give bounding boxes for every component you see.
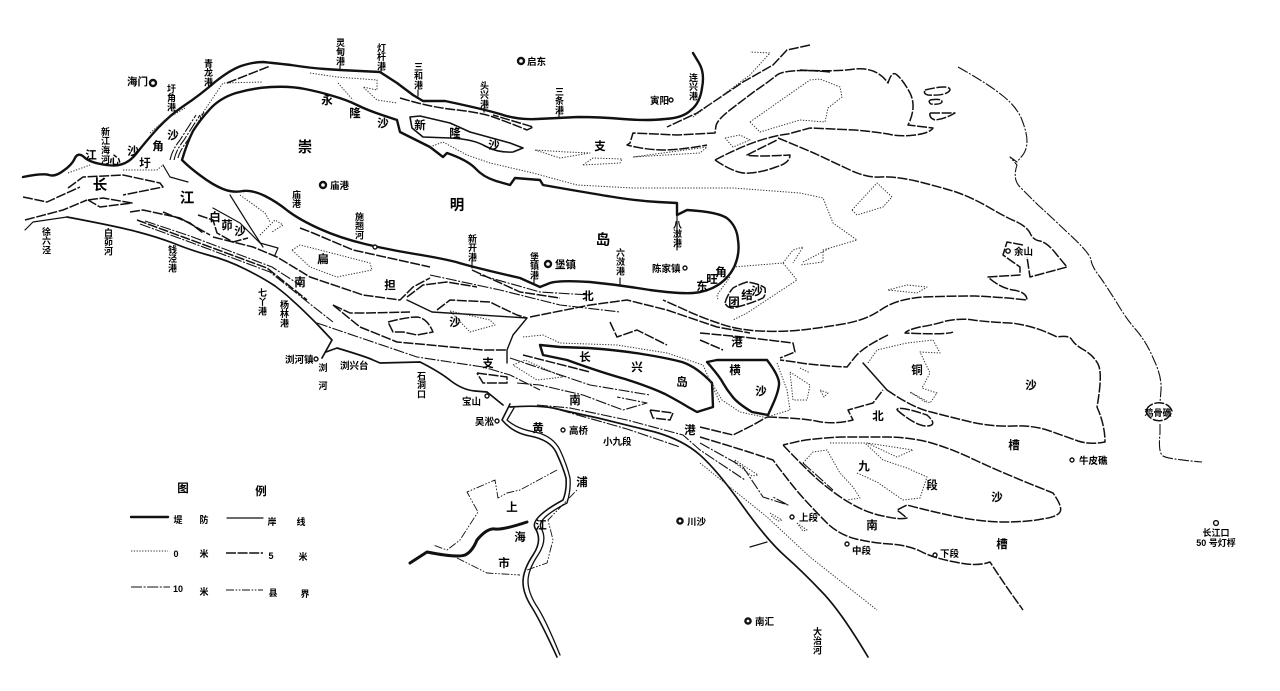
river-mouth tick marks <box>340 65 677 285</box>
vertical port labels: 庙港 <box>291 189 301 209</box>
legend row: levee and shoreline: 岸 <box>267 516 277 527</box>
water and shoal names: 沙 <box>449 316 461 329</box>
water and shoal names: 新 <box>414 118 426 132</box>
water and shoal names: 沙 <box>991 491 1003 504</box>
Biandan shoal and south branch <box>137 220 620 390</box>
vertical port labels: 杨林港 <box>279 299 289 328</box>
legend title: 图 <box>177 482 189 495</box>
vertical port labels: 头兴港 <box>479 80 489 109</box>
water and shoal names: 北 <box>582 290 594 303</box>
settlement markers <box>150 58 1218 624</box>
vertical port labels: 堡镇港 <box>529 251 539 280</box>
water and shoal names: 兴 <box>631 360 643 374</box>
water and shoal names: 团 <box>728 296 740 309</box>
water and shoal names: 北 <box>872 410 884 423</box>
legend title: 例 <box>255 484 267 498</box>
vertical port labels: 六滧港 <box>615 247 625 276</box>
water and shoal names: 角 <box>715 265 727 279</box>
vertical port labels: 七丫港 <box>257 288 267 316</box>
water and shoal names: 沙 <box>377 117 389 130</box>
water and shoal names: 支 <box>594 139 606 153</box>
Chongming north and outer channels <box>400 45 1067 331</box>
legend row: 10 metre and county border: 米 <box>199 586 209 597</box>
offshore 0 metre and Tuanjie shoal <box>717 183 927 320</box>
water and shoal names: 南 <box>866 519 878 532</box>
Chongming island levee <box>182 87 739 293</box>
Jiuduan shoal <box>783 437 1061 522</box>
horizontal place labels: 浏河镇 <box>285 354 314 366</box>
water and shoal names: 黄 <box>532 421 544 435</box>
south channel contours <box>517 383 1023 610</box>
legend row: 0 metre and 5 metre: 0 <box>173 549 179 559</box>
vertical port labels: 施翘河 <box>354 211 364 241</box>
vertical port labels: 圩角港 <box>166 83 176 112</box>
vertical port labels: 石洞口 <box>416 371 426 399</box>
vertical port labels: 三和港 <box>413 62 423 90</box>
vertical port labels: 新江海河 <box>100 126 110 165</box>
water and shoal names: 浦 <box>576 475 588 489</box>
Changxing island <box>510 300 795 412</box>
Suzhou Creek thick line <box>410 522 527 563</box>
horizontal place labels: 寅阳 <box>650 95 669 107</box>
Baimao shoal and upstream channels <box>23 66 283 255</box>
legend <box>131 482 310 599</box>
horizontal place labels: 鸡骨礁 <box>1144 407 1172 418</box>
water and shoal names: 横 <box>729 363 741 377</box>
water and shoal names: 段 <box>926 478 938 492</box>
water and shoal names: 江 <box>535 519 547 532</box>
water and shoal names: 东 <box>696 279 708 293</box>
legend row: 0 metre and 5 metre: 米 <box>298 551 308 562</box>
horizontal place labels: 中段 <box>852 545 872 557</box>
vertical port labels: 灵甸港 <box>335 38 345 66</box>
horizontal place labels: 上段 <box>799 512 818 524</box>
water and shoal names: 南 <box>569 394 581 407</box>
water and shoal names: 岛 <box>596 231 610 249</box>
legend row: levee and shoreline: 防 <box>199 514 209 525</box>
water and shoal names: 角 <box>152 139 164 153</box>
water and shoal names: 槽 <box>996 537 1008 551</box>
water and shoal names: 隆 <box>449 126 461 140</box>
horizontal place labels: 宝山 <box>462 396 481 408</box>
Shanghai boundary <box>433 470 577 575</box>
legend row: 0 metre and 5 metre: 5 <box>268 551 274 561</box>
horizontal place labels: 50 号灯桴 <box>1196 537 1236 548</box>
horizontal place labels: 河 <box>318 380 328 391</box>
horizontal place labels: 下段 <box>940 548 960 560</box>
vertical port labels: 钱泾港 <box>167 244 177 273</box>
vertical port labels: 白茆河 <box>103 227 113 257</box>
horizontal place labels: 小九段 <box>603 436 632 448</box>
water and shoal names: 九 <box>858 460 870 473</box>
horizontal place labels: 吴淞 <box>475 416 495 428</box>
legend row: 10 metre and county border: 县 <box>268 588 278 598</box>
vertical port labels: 新开港 <box>467 233 477 262</box>
water and shoal names: 港 <box>731 335 743 349</box>
horizontal place labels: 川沙 <box>687 517 706 528</box>
horizontal place labels: 启东 <box>527 56 546 68</box>
water and shoal names: 沙 <box>1025 379 1037 392</box>
vertical port labels <box>41 38 822 656</box>
water and shoal names: 白 <box>209 210 221 224</box>
horizontal place labels: 高桥 <box>569 425 588 437</box>
water and shoal names: 上 <box>506 501 518 514</box>
water and shoal names: 旺 <box>706 273 718 286</box>
water and shoal names: 沙 <box>234 225 246 238</box>
water and shoal names: 沙 <box>167 129 179 142</box>
water and shoal names: 铜 <box>911 363 923 377</box>
horizontal place labels: 长江口 <box>1202 527 1230 538</box>
legend row: levee and shoreline: 堤 <box>173 515 183 525</box>
water and shoal names: 江 <box>85 149 97 162</box>
water and shoal names: 沙 <box>127 145 139 158</box>
north bank levee <box>23 53 703 230</box>
horizontal place labels: 庙港 <box>330 180 350 192</box>
water and shoal names: 明 <box>450 198 464 214</box>
vertical port labels: 徐六泾 <box>41 226 51 256</box>
water and shoal names: 港 <box>684 423 696 437</box>
legend row: levee and shoreline <box>131 514 306 527</box>
horizontal place labels: 余山 <box>1014 246 1033 258</box>
legend row: levee and shoreline: 线 <box>296 516 306 527</box>
vertical port labels: 连兴港 <box>688 72 698 101</box>
water and shoal names: 永 <box>321 93 333 107</box>
legend title <box>177 482 267 498</box>
vertical port labels: 灯杆港 <box>376 43 386 71</box>
vertical port labels: 大治河 <box>812 626 822 656</box>
horizontal place labels: 堡镇 <box>555 258 576 271</box>
water and shoal names: 结 <box>741 288 753 302</box>
horizontal place labels <box>127 56 1236 628</box>
water and shoal names: 海 <box>514 530 526 544</box>
water and shoal names: 沙 <box>751 285 763 298</box>
water and shoal names: 茆 <box>221 218 233 232</box>
water and shoal names: 沙 <box>488 139 500 152</box>
legend row: 0 metre and 5 metre: 米 <box>199 548 209 559</box>
horizontal place labels: 浏 <box>318 362 328 373</box>
vertical port labels: 三条港 <box>554 87 564 115</box>
water and shoal names: 长 <box>579 350 591 364</box>
water and shoal names: 江 <box>180 190 195 207</box>
vertical port labels: 青龙港 <box>203 58 213 87</box>
water and shoal names: 崇 <box>298 139 312 156</box>
south bank shoreline <box>67 217 503 405</box>
horizontal place labels: 南汇 <box>755 616 774 628</box>
legend row: 0 metre and 5 metre <box>131 548 308 562</box>
water and shoal names <box>85 93 1037 570</box>
south coast east of Wusong <box>510 406 868 657</box>
horizontal place labels: 牛皮礁 <box>1079 455 1108 467</box>
Hengsha island <box>695 360 779 418</box>
horizontal place labels: 海门 <box>127 75 148 88</box>
water and shoal names: 扁 <box>317 252 329 266</box>
water and shoal names: 槽 <box>1008 438 1020 452</box>
water and shoal names: 市 <box>498 556 510 570</box>
water and shoal names: 长 <box>93 177 108 194</box>
legend row: 10 metre and county border <box>131 584 310 599</box>
water and shoal names: 岛 <box>676 375 688 389</box>
water and shoal names: 担 <box>384 278 396 292</box>
Huangpu River double line <box>502 404 570 657</box>
water and shoal names: 隆 <box>349 106 361 120</box>
outer 10 metre contour <box>958 67 1202 462</box>
vertical port labels: 八滧港 <box>672 220 682 248</box>
legend row: 10 metre and county border: 界 <box>300 589 310 599</box>
water and shoal names: 支 <box>482 356 494 370</box>
water and shoal names: 沙 <box>755 385 767 398</box>
legend row: 10 metre and county border: 10 <box>173 584 183 594</box>
Tongsha shoal <box>767 319 1105 443</box>
water and shoal names: 心 <box>109 154 121 167</box>
horizontal place labels: 浏兴台 <box>340 360 369 372</box>
water and shoal names: 南 <box>294 276 306 289</box>
Yonglong shoal and Xinlong shoal <box>310 52 857 265</box>
horizontal place labels: 陈家镇 <box>652 263 681 275</box>
water and shoal names: 圩 <box>139 157 151 170</box>
